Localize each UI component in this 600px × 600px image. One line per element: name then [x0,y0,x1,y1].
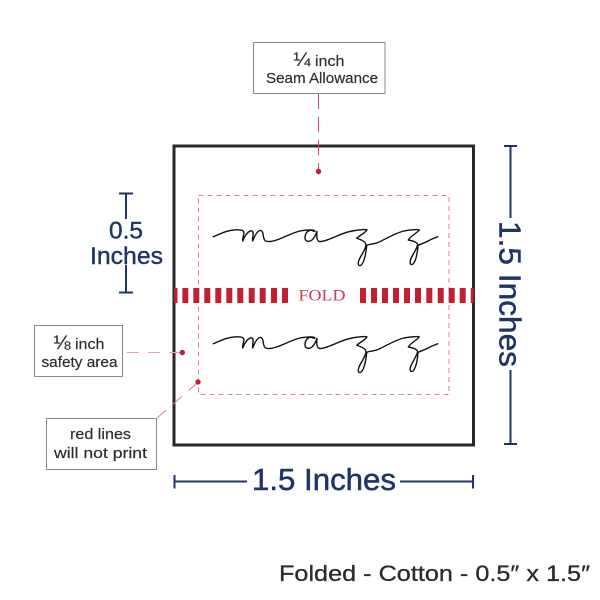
dimension: horizontal 1.5 inches [174,462,473,497]
dimension: 0.5 inches: Inches [90,243,163,270]
dimension: 0.5 inches [90,194,163,292]
fold label: FOLD [298,288,346,304]
script wordmark: top [213,230,438,266]
safety area dashed outline [198,196,449,394]
callout: safety area [34,326,122,376]
callout: red lines: will not print [53,445,148,462]
pointer: red lines [157,379,201,418]
callout: seam allowance [254,42,385,94]
callout: red lines [46,418,156,470]
callout: seam allowance: ¼ inch [294,50,344,71]
callout: seam allowance: Seam Allowance [266,70,378,87]
fold stripes [174,288,474,303]
footer caption: Folded - Cotton - 0.5″ x 1.5″ [279,561,590,586]
pointer: safety area [127,350,185,355]
dimension: horizontal 1.5 inches: 1.5 Inches [252,462,396,497]
callout: safety area: ⅛ inch [54,333,104,354]
outer label frame [174,146,474,445]
callout: safety area: safety area [42,354,118,371]
dimension: vertical 1.5 inches [492,146,528,444]
script wordmark: bottom [213,337,438,373]
dimension: vertical 1.5 inches: 1.5 Inches [492,221,528,367]
dimension: 0.5 inches: 0.5 [109,218,143,244]
pointer: seam allowance [316,94,321,174]
callout: red lines: red lines [70,426,131,443]
